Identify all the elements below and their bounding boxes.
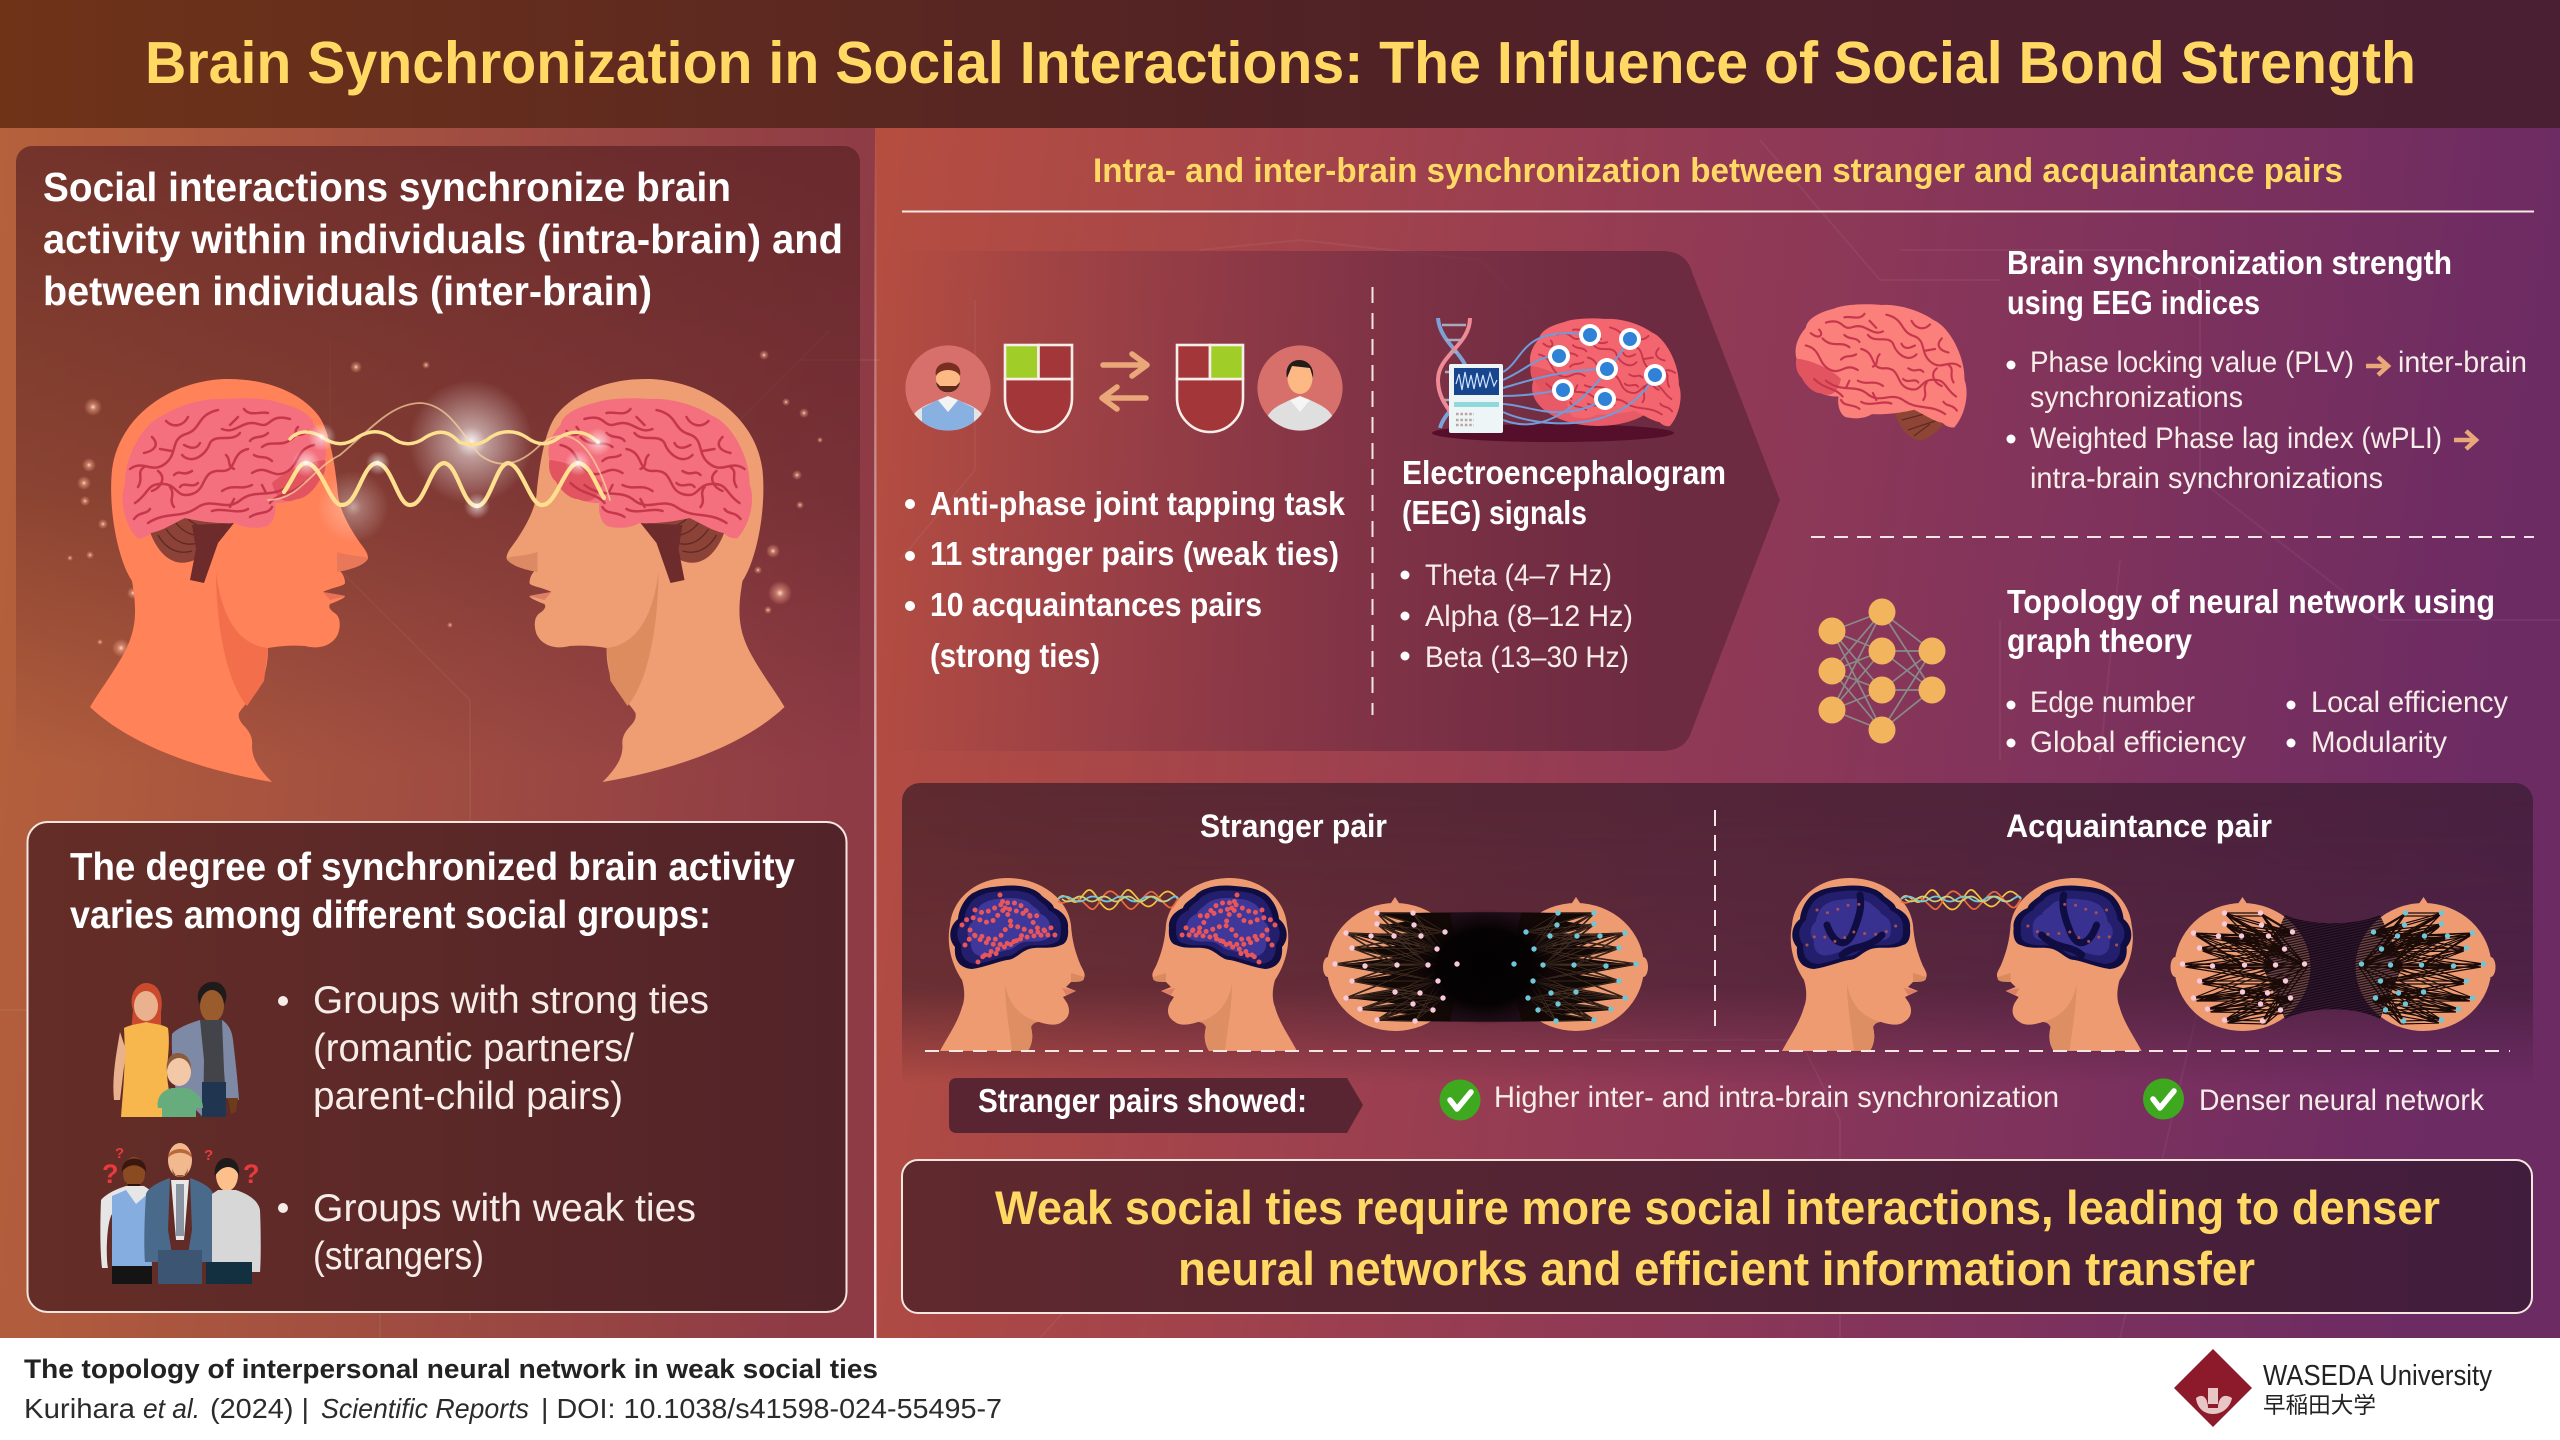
intro heading: activity within individuals (intra-brain) and xyxy=(43,216,843,262)
EEG bands list xyxy=(1400,559,1633,674)
icon: weak ties strangers: ? xyxy=(102,1159,118,1189)
icon: weak ties strangers: ? xyxy=(204,1147,213,1164)
heading: acquaintance pair: Acquaintance pair xyxy=(2006,808,2272,844)
footer citation: Kurihara xyxy=(24,1393,135,1424)
EEG heading: Electroencephalogram xyxy=(1402,454,1726,491)
bullet: weak ties: Groups with weak ties xyxy=(313,1187,696,1230)
panel: social interactions intro xyxy=(16,146,860,766)
icon: strong ties family xyxy=(113,982,239,1117)
icon: participant right xyxy=(1257,345,1343,432)
intro heading: Social interactions synchronize brain xyxy=(43,164,731,210)
footer citation xyxy=(24,1354,1002,1424)
section: topology: graph theory xyxy=(2007,622,2193,659)
logo: Waseda University: 早稲田大学 xyxy=(2263,1387,2376,1420)
icon: weak ties strangers: ? xyxy=(115,1145,124,1162)
bullet: weak ties: (strangers) xyxy=(313,1235,484,1278)
EEG heading: (EEG) signals xyxy=(1402,494,1587,531)
logo: Waseda University xyxy=(2174,1349,2492,1427)
section: synchronization strength: inter-brain xyxy=(2398,346,2527,379)
conclusion box: Weak social ties require more social interactions, leading to denser xyxy=(995,1181,2440,1234)
conclusion box: neural networks and efficient information transfer xyxy=(1178,1242,2255,1295)
panel: social groups xyxy=(28,822,846,1312)
social groups heading: The degree of synchronized brain activity xyxy=(70,846,795,889)
footer citation: Scientific Reports xyxy=(321,1393,529,1424)
left divider xyxy=(874,130,876,1338)
EEG bands list: Theta (4–7 Hz) xyxy=(1425,559,1612,592)
conclusion box xyxy=(902,1160,2532,1313)
intro heading xyxy=(43,164,843,314)
section: topology: Edge number xyxy=(2030,686,2195,719)
section: synchronization strength: synchronizations xyxy=(2030,381,2243,414)
icon: brain xyxy=(1796,304,1967,440)
footer citation: The topology of interpersonal neural network in weak social ties xyxy=(24,1354,878,1384)
illustration: right head xyxy=(506,379,784,782)
illustration: left head xyxy=(90,379,368,782)
section: topology: Modularity xyxy=(2311,726,2447,759)
result: denser network xyxy=(2143,1078,2485,1120)
synchronization waves xyxy=(268,380,612,543)
badge: stranger pairs showed: Stranger pairs showed: xyxy=(978,1082,1307,1119)
section: topology xyxy=(2006,583,2508,759)
EEG heading xyxy=(1402,454,1726,531)
dashed divider xyxy=(1372,287,1374,715)
heading: stranger pair: Stranger pair xyxy=(1200,808,1387,844)
task bullets: (strong ties) xyxy=(930,637,1100,674)
section: synchronization strength: using EEG indices xyxy=(2007,284,2260,321)
subheading: right section: Intra- and inter-brain synchronization between stranger and acquaintance pairs xyxy=(1093,152,2343,190)
result: higher synchronization: Higher inter- and intra-brain synchronization xyxy=(1494,1081,2059,1114)
badge: stranger pairs showed xyxy=(949,1078,1363,1133)
task bullets: 11 stranger pairs (weak ties) xyxy=(930,535,1339,572)
section: synchronization strength xyxy=(2006,244,2527,495)
section: synchronization strength: Brain synchronization strength xyxy=(2007,244,2452,281)
EEG bands list: Alpha (8–12 Hz) xyxy=(1425,600,1633,633)
bullet: strong ties: (romantic partners/ xyxy=(313,1027,634,1070)
icon: mouse left xyxy=(1005,345,1072,432)
title: Brain Synchronization in Social Interactions: The Influence of Social Bond Strength xyxy=(145,30,2416,96)
panel: pair comparison xyxy=(902,783,2533,1103)
icon: weak ties strangers xyxy=(100,1143,261,1284)
header banner xyxy=(0,0,2560,128)
bullet: strong ties: Groups with strong ties xyxy=(313,979,709,1022)
section: topology: Topology of neural network using xyxy=(2007,583,2495,620)
sparkles xyxy=(67,350,823,657)
icon: mouse right xyxy=(1177,345,1243,432)
social groups heading: varies among different social groups: xyxy=(70,894,711,937)
bullet: weak ties xyxy=(278,1187,696,1278)
task bullets xyxy=(905,485,1346,674)
footer citation: | DOI: 10.1038/s41598-024-55495-7 xyxy=(541,1393,1002,1424)
logo: Waseda University: WASEDA University xyxy=(2263,1360,2492,1392)
network map: stranger xyxy=(1323,897,1648,1031)
bullet: strong ties xyxy=(278,979,709,1118)
illustration: acquaintance heads xyxy=(1782,878,2142,1051)
network map: acquaintance xyxy=(2170,897,2496,1031)
task bullets: Anti-phase joint tapping task xyxy=(930,485,1346,522)
icon: EEG setup xyxy=(1432,318,1681,442)
icon: participant left xyxy=(905,345,991,432)
panel: methods chevron xyxy=(880,251,1780,751)
section: synchronization strength: Weighted Phase lag index (wPLI) xyxy=(2030,422,2442,455)
result: denser network: Denser neural network xyxy=(2199,1084,2485,1117)
task bullets: 10 acquaintances pairs xyxy=(930,586,1262,623)
EEG bands list: Beta (13–30 Hz) xyxy=(1425,641,1629,674)
footer citation: et al. xyxy=(143,1393,200,1424)
footer citation: (2024) | xyxy=(210,1393,309,1424)
section: synchronization strength: intra-brain synchronizations xyxy=(2030,462,2383,495)
arrows: exchange xyxy=(1102,354,1147,409)
section: topology: Local efficiency xyxy=(2311,686,2508,719)
section: synchronization strength: Phase locking value (PLV) xyxy=(2030,346,2354,379)
social groups heading xyxy=(70,846,795,937)
bullet: strong ties: parent-child pairs) xyxy=(313,1075,623,1118)
arrow xyxy=(2366,357,2388,375)
illustration: stranger heads xyxy=(940,878,1297,1051)
intro heading: between individuals (inter-brain) xyxy=(43,268,652,314)
icon: weak ties strangers: ? xyxy=(243,1159,260,1189)
section: topology: Global efficiency xyxy=(2030,726,2246,759)
arrow xyxy=(2454,431,2476,449)
icon: neural network xyxy=(1818,598,1946,744)
